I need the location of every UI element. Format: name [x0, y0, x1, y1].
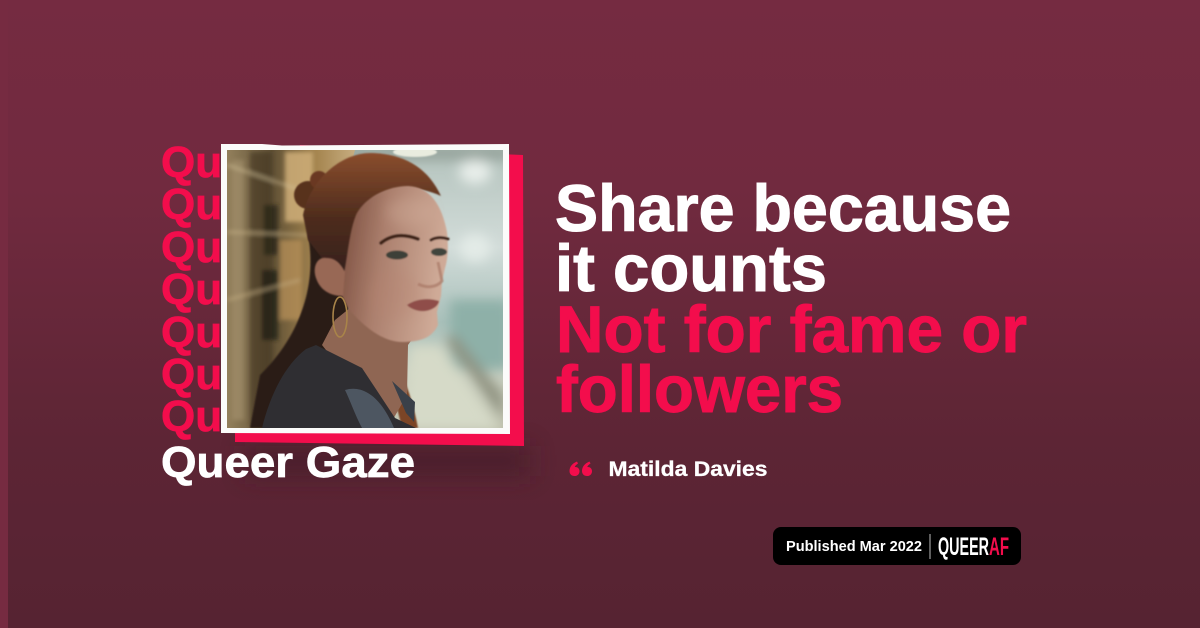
headline [555, 171, 1027, 426]
photo: neck [322, 308, 411, 417]
photo: brick wall [227, 150, 355, 430]
photo: hoop earring [333, 297, 347, 337]
left edge strip [0, 0, 8, 628]
headline red line 1: Not for fame or [556, 292, 1027, 366]
repeated Qu text stack: Queer [161, 265, 288, 314]
author name: Matilda Davies [608, 458, 768, 481]
photo: shirt [262, 345, 416, 428]
section label: Queer Gaze [161, 438, 415, 487]
photo: nose and mouth [418, 262, 442, 287]
headline white line 2: it counts [555, 231, 827, 305]
logo: QUEER AF: AF [989, 533, 1009, 561]
icon: quote marks [570, 462, 592, 476]
red offset panel behind photo [235, 145, 524, 446]
shadow under photo card [245, 446, 530, 476]
repeated Qu text stack: Queer [161, 180, 288, 229]
logo: QUEER AF: QUEER [938, 533, 989, 561]
photo: ear [315, 258, 345, 296]
photo: hair and bun [293, 152, 442, 269]
publication badge [773, 527, 1021, 565]
repeated Qu text stack [161, 138, 288, 441]
badge background [773, 527, 1021, 565]
white photo frame [221, 144, 510, 434]
headline white line 1: Share because [555, 171, 1011, 245]
repeated Qu text stack: Queer [161, 223, 288, 272]
photo: long hair falling [250, 235, 355, 428]
repeated Qu text stack: Queer [161, 392, 288, 441]
attribution [570, 458, 768, 481]
repeated Qu text stack: Queer [161, 138, 288, 187]
photo: brows and eyes [381, 236, 418, 243]
repeated Qu text stack: Queer [161, 308, 288, 357]
photo: corridor background [348, 150, 503, 428]
repeated Qu text stack: Queer [161, 350, 288, 399]
headline red line 2: followers [556, 352, 843, 426]
portrait photo [227, 146, 510, 430]
publication date: Published Mar 2022 [786, 538, 922, 555]
photo: face [315, 186, 448, 342]
